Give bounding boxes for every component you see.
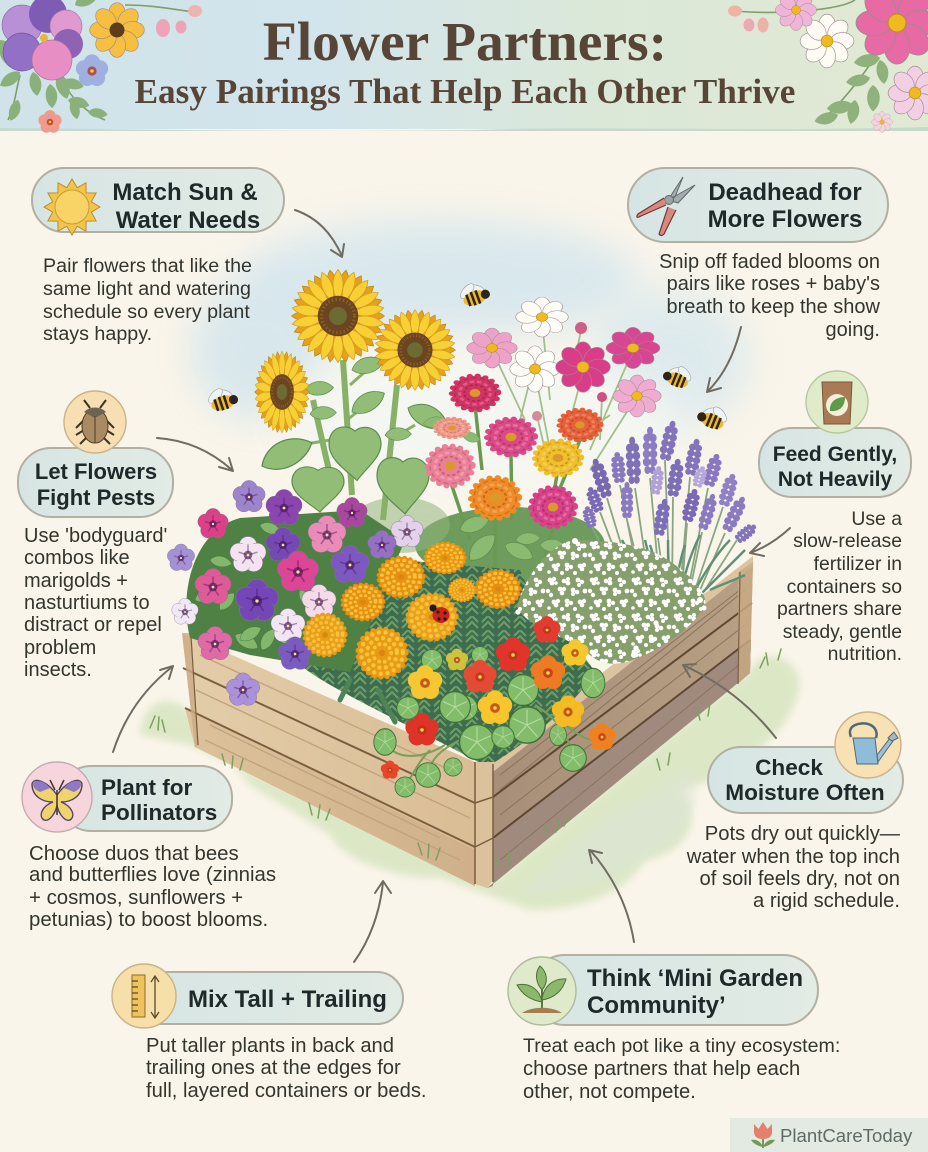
callout: feed gently: steady, gentle xyxy=(783,621,902,643)
icon: watering can xyxy=(835,712,901,778)
callout: think mini garden community xyxy=(508,955,840,1103)
title: Easy Pairings That Help Each Other Thrive xyxy=(135,72,795,111)
wooden bed xyxy=(182,556,753,888)
grass tufts xyxy=(150,649,781,868)
callout: think mini garden community: choose partners that help each xyxy=(523,1058,800,1080)
arrow: pests to petunias xyxy=(157,438,233,471)
callout: plant for pollinators xyxy=(22,762,276,931)
callout: plant for pollinators: Plant for xyxy=(101,775,192,800)
callout: deadhead for more flowers xyxy=(628,168,888,341)
callout: let flowers fight pests: insects. xyxy=(24,659,92,681)
callout: match sun and water needs: Match Sun & xyxy=(112,179,258,206)
icon: pruning shears xyxy=(637,177,695,235)
callout: match sun and water needs: schedule so every plant xyxy=(43,301,250,323)
arrow: moisture to bed xyxy=(683,664,776,738)
callout: feed gently: Not Heavily xyxy=(778,468,893,491)
zinnias xyxy=(422,376,601,570)
header banner xyxy=(0,0,928,131)
header flowers left xyxy=(0,0,202,133)
callout: check moisture often: of soil feels dry, not on xyxy=(700,868,900,890)
callout: think mini garden community: Treat each pot like a tiny ecosystem: xyxy=(523,1035,840,1057)
nasturtiums xyxy=(374,616,616,797)
marigold and nasturtium foliage xyxy=(300,560,595,762)
callout: let flowers fight pests: Use 'bodyguard' xyxy=(24,525,167,547)
icon: butterfly xyxy=(22,762,92,832)
arrow: think to bed xyxy=(589,850,634,942)
callout: feed gently: containers so xyxy=(787,576,902,598)
header flowers right xyxy=(728,0,928,132)
background watercolor washes xyxy=(140,220,800,910)
callout: feed gently: Use a xyxy=(851,508,902,530)
callout: let flowers fight pests: marigolds + xyxy=(24,570,128,592)
icon: seedling xyxy=(508,957,576,1025)
callout: match sun and water needs: stays happy. xyxy=(43,323,152,345)
callout: plant for pollinators: + cosmos, sunflowers + xyxy=(29,887,243,909)
icon: tulip xyxy=(751,1122,775,1148)
callout: feed gently xyxy=(759,371,911,665)
sweet alyssum xyxy=(515,538,706,664)
callout: deadhead for more flowers: Deadhead for xyxy=(708,179,862,206)
bees xyxy=(203,276,732,433)
callout: match sun and water needs: Pair flowers that like the xyxy=(43,255,252,277)
callout: let flowers fight pests: distract or repel xyxy=(24,614,162,636)
zinnia and low foliage xyxy=(350,497,605,583)
ladybug xyxy=(429,604,450,623)
arrow: match sun to sunflowers xyxy=(295,210,344,257)
callout: mix tall and trailing xyxy=(112,964,427,1102)
cosmos xyxy=(467,297,661,470)
callout: deadhead for more flowers: going. xyxy=(826,319,880,341)
callout: deadhead for more flowers: breath to keep the show xyxy=(667,296,881,318)
callout: plant for pollinators: and butterflies love (zinnias xyxy=(29,864,276,886)
footer logo: PlantCareToday xyxy=(780,1125,913,1146)
callout: feed gently: Feed Gently, xyxy=(773,443,897,466)
callout: think mini garden community: Think ‘Mini Garden xyxy=(587,965,803,992)
callout: mix tall and trailing: Mix Tall + Trailing xyxy=(188,986,387,1013)
callout: let flowers fight pests: combos like xyxy=(24,547,130,569)
callout: plant for pollinators: petunias) to boost blooms. xyxy=(29,909,268,931)
callout: think mini garden community: Community’ xyxy=(587,992,726,1019)
callout: feed gently: fertilizer in xyxy=(814,553,902,575)
callout: mix tall and trailing: full, layered containers or beds. xyxy=(146,1080,427,1102)
callout: mix tall and trailing: Put taller plants in back and xyxy=(146,1035,394,1057)
title: Flower Partners: xyxy=(263,12,667,73)
callout: deadhead for more flowers: Snip off faded blooms on xyxy=(659,251,880,273)
footer logo xyxy=(730,1118,928,1152)
callout: match sun and water needs: Water Needs xyxy=(116,207,260,234)
arrow: mix to bed xyxy=(354,881,391,962)
callout: let flowers fight pests xyxy=(18,391,173,681)
arrow: pollinators to bed xyxy=(113,666,173,752)
sunflowers xyxy=(250,262,462,520)
callout: let flowers fight pests: Let Flowers xyxy=(35,459,157,484)
callout: mix tall and trailing: trailing ones at the edges for xyxy=(146,1057,401,1079)
callout: plant for pollinators: Pollinators xyxy=(101,800,217,825)
icon: beetle xyxy=(64,391,126,453)
icon: fertilizer bag xyxy=(806,371,868,433)
callout: check moisture often: a rigid schedule. xyxy=(753,890,900,912)
icon: sun xyxy=(44,179,100,235)
callout: check moisture often: Moisture Often xyxy=(725,780,885,805)
lavender xyxy=(581,419,759,605)
marigolds xyxy=(304,543,520,678)
callout: check moisture often: Pots dry out quickly— xyxy=(705,823,901,845)
callout: feed gently: nutrition. xyxy=(828,643,902,665)
petunias xyxy=(167,480,423,705)
callout: think mini garden community: other, not compete. xyxy=(523,1081,696,1103)
callout: check moisture often: Check xyxy=(755,755,823,780)
callout: feed gently: partners share xyxy=(777,598,902,620)
callout: match sun and water needs xyxy=(32,168,284,345)
illustration: raised wooden bed with flowers xyxy=(150,262,781,888)
callout: check moisture often: water when the top inch xyxy=(686,846,900,868)
callout: let flowers fight pests: Fight Pests xyxy=(37,485,155,510)
callout: check moisture often xyxy=(686,712,903,912)
callout: let flowers fight pests: problem xyxy=(24,637,96,659)
icon: height ruler xyxy=(112,964,176,1028)
arrow: feed to lavender xyxy=(750,528,790,556)
title xyxy=(135,12,795,111)
callout: plant for pollinators: Choose duos that bees xyxy=(29,843,239,865)
callout: feed gently: slow-release xyxy=(793,530,902,552)
callout: let flowers fight pests: nasturtiums to xyxy=(24,592,150,614)
callout: deadhead for more flowers: More Flowers xyxy=(708,206,862,233)
arrow: deadhead to cosmos xyxy=(707,327,741,392)
callout: match sun and water needs: same light and watering xyxy=(43,278,251,300)
callout: deadhead for more flowers: pairs like roses + baby's xyxy=(667,273,880,295)
